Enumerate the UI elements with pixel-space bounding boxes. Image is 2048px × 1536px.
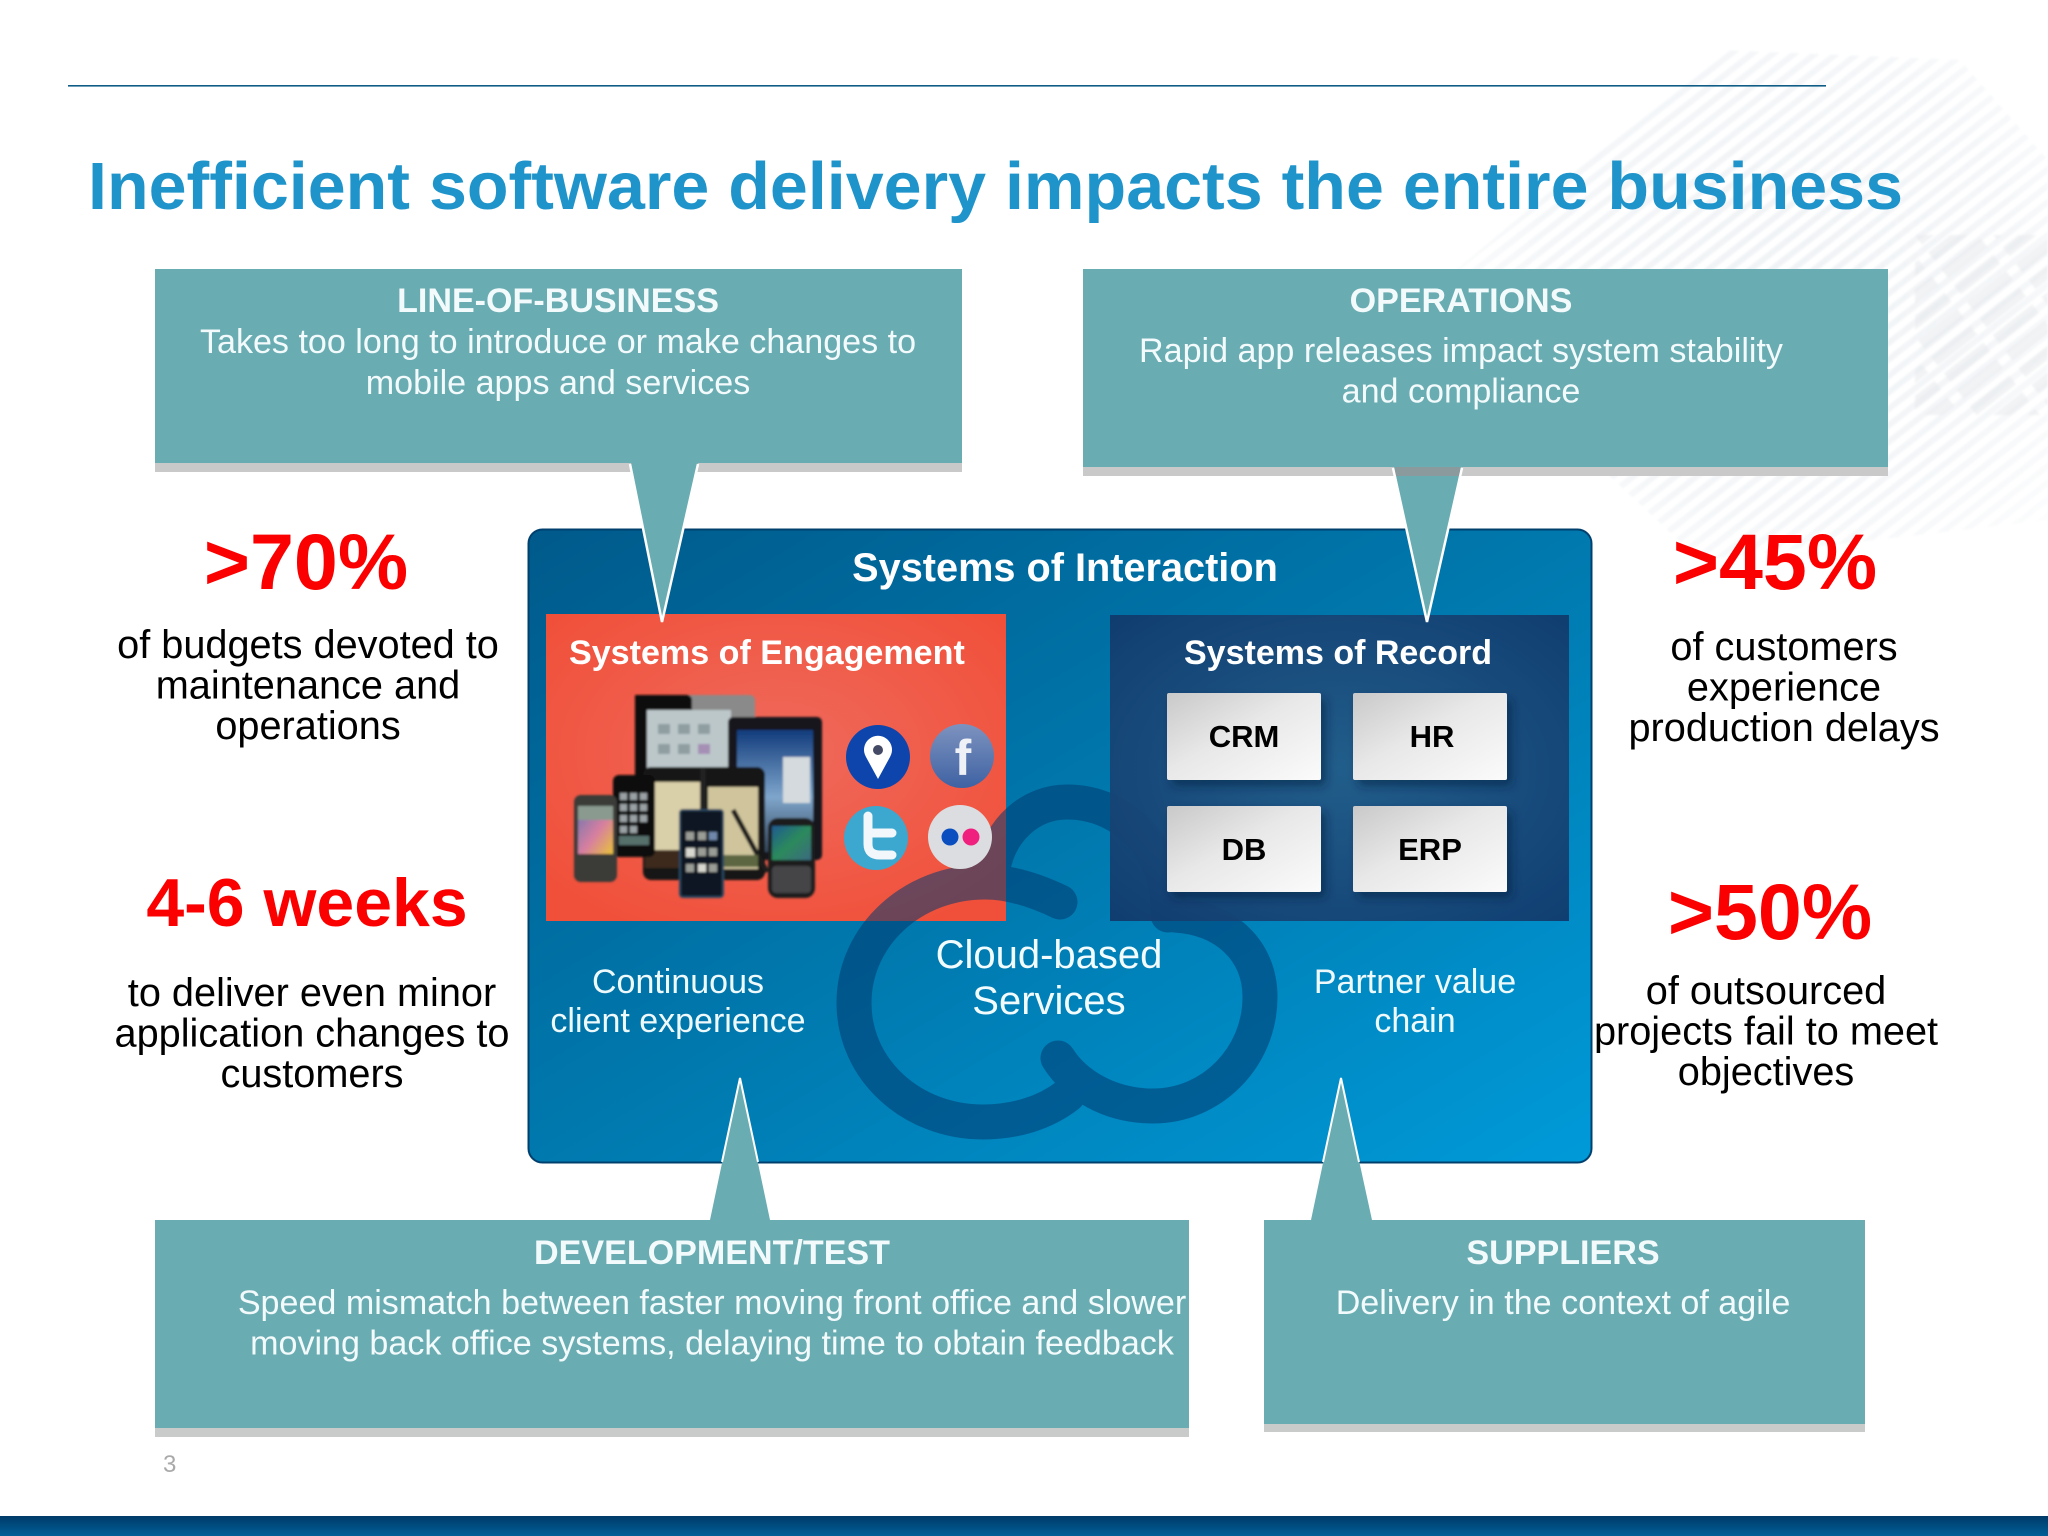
label: partner value chain: chain	[1374, 1002, 1456, 1040]
callout: suppliers	[1264, 1078, 1865, 1432]
card: HR	[1353, 693, 1507, 780]
page number: 3	[163, 1451, 176, 1478]
icon: map pin	[846, 725, 910, 789]
card: HR: HR	[1410, 719, 1454, 754]
icon: twitter	[844, 806, 908, 870]
label: partner value chain: Partner value	[1314, 963, 1516, 1001]
stat: over 45 percent: >45%	[1673, 517, 1877, 606]
card: ERP: ERP	[1398, 832, 1462, 867]
label: cloud-based services: Cloud-based	[936, 933, 1162, 977]
card: DB: DB	[1222, 832, 1266, 867]
arrow: operations pointer	[1393, 467, 1462, 622]
text: suppliers: Delivery in the context of agile	[1336, 1284, 1790, 1322]
text: line-of-business: mobile apps and services	[366, 364, 750, 402]
arrow: development/test pointer	[710, 1078, 770, 1220]
text: development/test: Speed mismatch between faster moving front office and slower	[238, 1284, 1186, 1322]
text: operations: and compliance	[1342, 372, 1580, 410]
callout: development/test	[155, 1078, 1189, 1437]
callout: operations	[1083, 269, 1888, 622]
header rule	[68, 85, 1826, 87]
stat: over 45 percent: of customers	[1670, 625, 1898, 669]
stat: over 50 percent: objectives	[1678, 1050, 1854, 1094]
callout: line-of-business	[155, 269, 962, 622]
stat: 4-6 weeks: to deliver even minor	[128, 971, 496, 1015]
stat: over 70 percent: of budgets devoted to	[117, 623, 499, 667]
stat: 4-6 weeks: application changes to	[115, 1012, 509, 1056]
footer bar	[0, 1516, 2048, 1536]
stat: over 45 percent: production delays	[1628, 706, 1940, 750]
label: continuous client experience: client experience	[550, 1002, 806, 1040]
heading: development/test: DEVELOPMENT/TEST	[534, 1234, 890, 1272]
heading: operations: OPERATIONS	[1350, 282, 1572, 320]
icon: facebook	[930, 724, 994, 788]
stat: over 70 percent: maintenance and	[156, 664, 460, 708]
title: Inefficient software delivery impacts the entire business	[88, 149, 1903, 224]
text: line-of-business: Takes too long to introduce or make changes to	[200, 323, 916, 361]
arrow: line-of-business pointer	[630, 463, 698, 622]
card: CRM	[1167, 693, 1321, 780]
stat: over 50 percent: >50%	[1668, 867, 1872, 956]
icon: flickr	[928, 805, 992, 869]
stat: over 45 percent	[1628, 517, 1940, 750]
heading: systems of record: Systems of Record	[1184, 634, 1492, 672]
card: ERP	[1353, 806, 1507, 892]
text: development/test: moving back office systems, delaying time to obtain feedback	[250, 1324, 1175, 1362]
heading: line-of-business: LINE-OF-BUSINESS	[397, 282, 719, 320]
icon: cloud outline	[854, 802, 1260, 1122]
heading: systems of engagement: Systems of Engagement	[569, 634, 965, 672]
label: cloud-based services: Services	[972, 979, 1126, 1023]
stat: over 50 percent	[1594, 867, 1938, 1094]
panel: systems of record	[1110, 615, 1569, 921]
stat: 4-6 weeks: customers	[220, 1052, 404, 1096]
stat: over 50 percent: of outsourced	[1646, 969, 1886, 1013]
card: CRM: CRM	[1209, 719, 1279, 754]
panel: systems of interaction	[528, 530, 1592, 1162]
icon: facebook: f	[955, 730, 972, 786]
card: DB	[1167, 806, 1321, 892]
stat: 4-6 weeks: 4-6 weeks	[146, 865, 468, 941]
stat: over 70 percent: >70%	[204, 517, 408, 606]
devices illustration	[574, 695, 822, 898]
stat: over 70 percent	[117, 517, 499, 748]
stat: 4-6 weeks	[115, 865, 509, 1096]
heading: suppliers: SUPPLIERS	[1466, 1234, 1660, 1272]
stat: over 50 percent: projects fail to meet	[1594, 1010, 1938, 1054]
text: operations: Rapid app releases impact system stability	[1139, 332, 1783, 370]
stat: over 70 percent: operations	[215, 704, 401, 748]
stat: over 45 percent: experience	[1687, 666, 1881, 710]
heading: systems of interaction: Systems of Interaction	[852, 546, 1278, 590]
arrow: suppliers pointer	[1311, 1078, 1372, 1220]
panel: systems of engagement	[546, 614, 1006, 921]
label: continuous client experience: Continuous	[592, 963, 764, 1001]
background stripe pattern	[1510, 52, 2048, 548]
